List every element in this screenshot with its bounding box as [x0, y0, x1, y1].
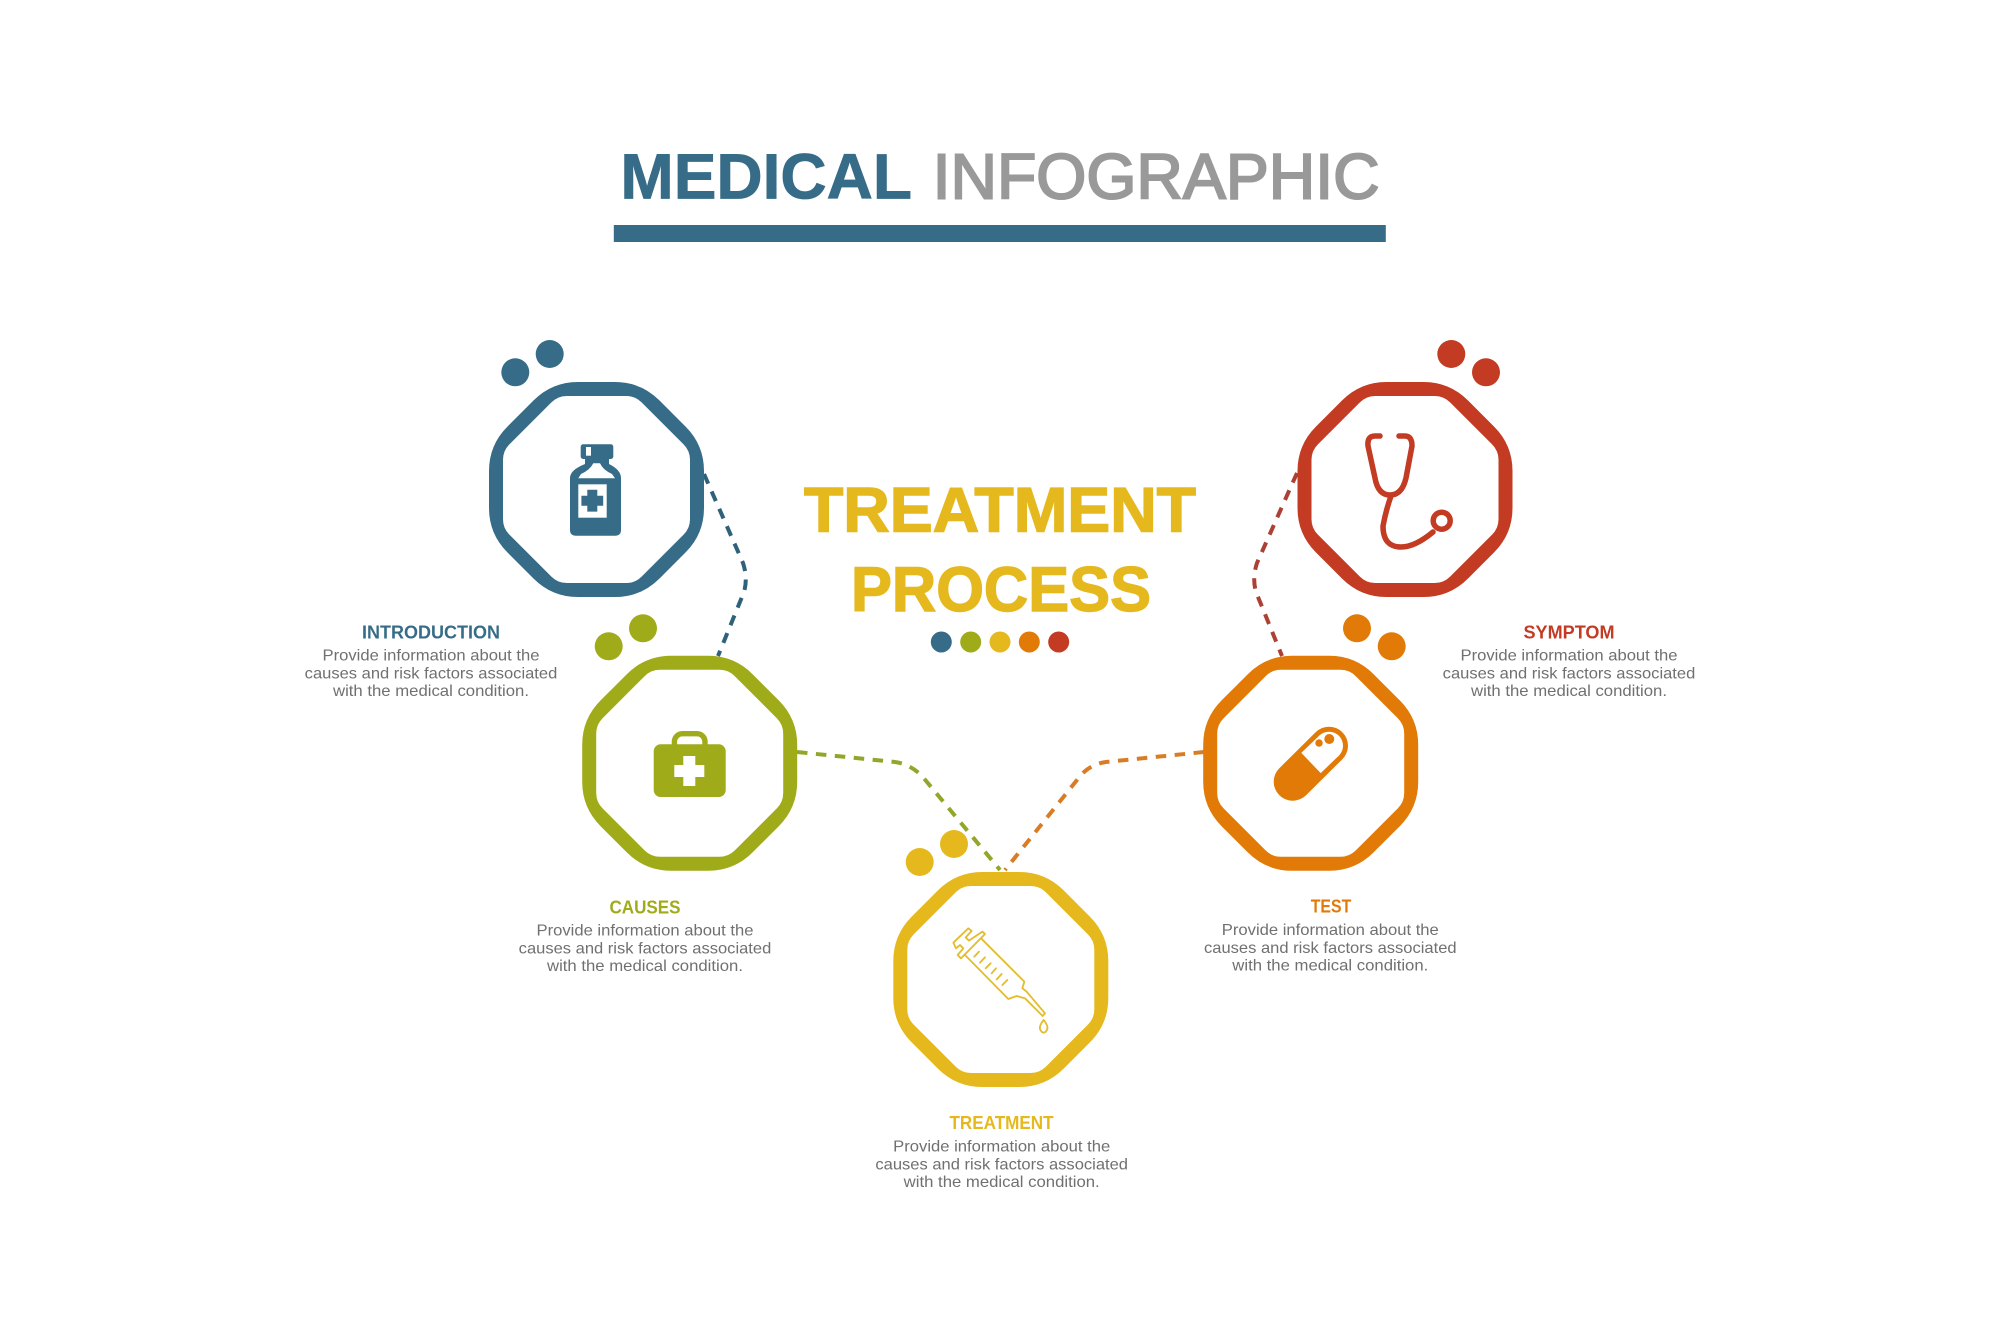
title: MEDICAL — [620, 140, 912, 212]
text: test: with the medical condition. — [1231, 958, 1428, 974]
connector: test to treatment — [1005, 752, 1204, 870]
text: treatment: TREATMENT — [950, 1112, 1054, 1133]
text: introduction: INTRODUCTION — [362, 621, 500, 642]
octagon ring: symptom — [1298, 382, 1512, 597]
text: causes — [519, 896, 771, 975]
text: symptom: causes and risk factors associated — [1443, 665, 1695, 682]
text: treatment: causes and risk factors associated — [875, 1156, 1128, 1173]
text: symptom — [1443, 621, 1695, 700]
octagon ring: test — [1203, 656, 1418, 871]
octagon ring: treatment — [893, 872, 1108, 1087]
text: causes: with the medical condition. — [546, 958, 743, 975]
five colored step dots — [931, 632, 1069, 652]
center heading: treatment process: PROCESS — [851, 555, 1151, 625]
text: symptom: with the medical condition. — [1470, 683, 1667, 700]
center heading: treatment process: TREATMENT — [804, 475, 1196, 545]
panel: test — [1203, 614, 1457, 974]
octagon ring: introduction — [489, 382, 704, 597]
text: test: Provide information about the — [1222, 922, 1439, 939]
text: introduction — [305, 621, 557, 700]
icon: capsule pill — [1293, 732, 1343, 782]
decorative dots: introduction — [501, 340, 564, 386]
icon: first aid kit — [654, 734, 726, 797]
text: treatment: Provide information about the — [893, 1139, 1110, 1156]
connector: symptom to test — [1254, 473, 1297, 656]
decorative dots: causes — [595, 614, 657, 660]
octagon ring: causes — [582, 656, 797, 871]
connector: causes to treatment — [797, 752, 1000, 870]
text: causes: causes and risk factors associated — [519, 940, 771, 957]
connector: introduction to causes — [704, 474, 746, 656]
text: introduction: Provide information about the — [322, 648, 540, 665]
decorative dots: symptom — [1437, 340, 1500, 386]
decorative dots: treatment — [906, 830, 968, 876]
icon: medicine bottle — [570, 444, 621, 536]
text: symptom: Provide information about the — [1460, 648, 1678, 665]
icon: stethoscope — [1368, 436, 1450, 547]
text: causes: Provide information about the — [536, 923, 754, 940]
text: test: TEST — [1311, 896, 1352, 917]
panel: introduction — [305, 340, 704, 700]
text: test: causes and risk factors associated — [1204, 940, 1457, 957]
icon: syringe — [953, 928, 1047, 1033]
center heading: treatment process — [804, 475, 1196, 625]
text: introduction: with the medical condition. — [332, 683, 529, 700]
text: treatment — [875, 1112, 1128, 1191]
decorative dots: test — [1343, 614, 1406, 660]
title: INFOGRAPHIC — [933, 140, 1380, 212]
title — [620, 140, 1380, 212]
text: causes: CAUSES — [610, 896, 680, 917]
text: introduction: causes and risk factors associated — [305, 665, 557, 682]
panel: causes — [519, 614, 797, 975]
title underline bar — [614, 225, 1386, 242]
text: test — [1204, 896, 1457, 974]
text: symptom: SYMPTOM — [1524, 621, 1614, 642]
text: treatment: with the medical condition. — [903, 1174, 1100, 1191]
panel: treatment — [875, 830, 1128, 1191]
panel: symptom — [1298, 340, 1695, 700]
